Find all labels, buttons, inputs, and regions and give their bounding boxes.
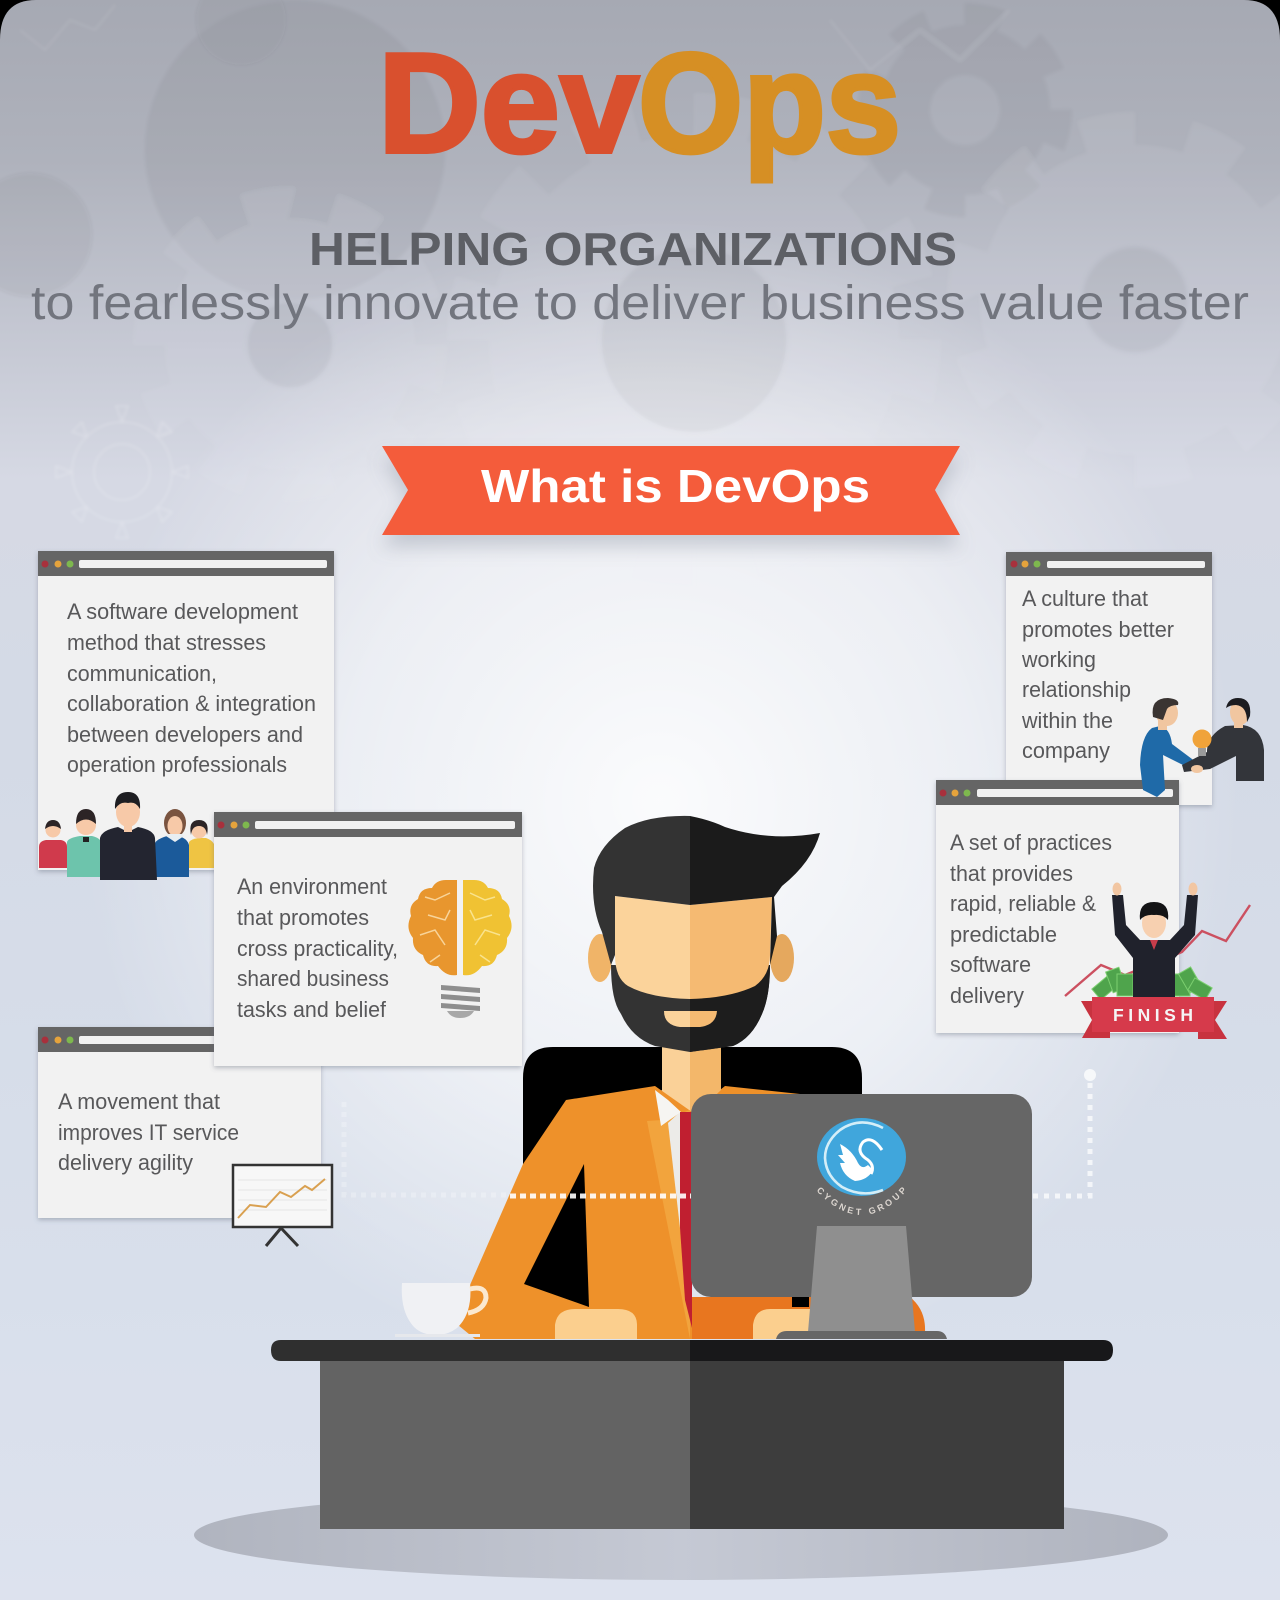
panel: culture working relationship: relationship (1022, 677, 1131, 702)
icon: presentation chart board (233, 1165, 332, 1246)
panel: software development method: communication, (67, 661, 217, 686)
panel: environment cross practicality: An environment (237, 874, 387, 899)
panel: set of practices: A set of practices (950, 830, 1112, 855)
illustration: office chair (523, 1047, 862, 1175)
neck (655, 1040, 721, 1120)
finish ribbon: FINISH (1113, 1005, 1193, 1025)
panel: environment cross practicality: cross practicality, (237, 936, 398, 961)
mouth (664, 1011, 717, 1027)
logo: Cygnet Group (817, 1118, 906, 1215)
banner: What is DevOps (382, 446, 960, 535)
panel: culture working relationship: A culture that (1022, 586, 1148, 611)
panel: set of practices: delivery (950, 983, 1024, 1008)
person arms raised (1112, 882, 1198, 997)
beard (611, 965, 770, 1052)
lightbulb (1192, 730, 1212, 756)
man in black (1182, 698, 1264, 781)
lower suit right (692, 1297, 925, 1339)
panel: software development method: A software development (67, 599, 298, 624)
title: DevOps (378, 24, 901, 183)
panel: software development method (38, 551, 334, 870)
panel: environment cross practicality: that promotes (237, 905, 369, 930)
panel: software development method: operation professionals (67, 752, 287, 777)
panel: set of practices: rapid, reliable & (950, 891, 1096, 916)
person: black centre (100, 792, 157, 880)
right suit shoulder (690, 1086, 800, 1160)
monitor base (776, 1331, 947, 1339)
icon: handshake (1140, 698, 1264, 797)
icon: coffee cup (395, 1283, 486, 1337)
panel: set of practices: software (950, 952, 1031, 977)
dotted line across suit (510, 1194, 694, 1198)
person: yellow (189, 820, 214, 868)
icon: brain light bulb (408, 880, 512, 1018)
panel: culture working relationship (1006, 552, 1212, 805)
background gears (0, 0, 1280, 565)
icon: group of people (39, 792, 214, 880)
subtitle: to fearlessly innovate to deliver business value faster (31, 277, 1249, 330)
face (615, 896, 772, 999)
panel: movement improves IT service (38, 1027, 321, 1218)
suit inner shadow (524, 1164, 589, 1307)
panel: culture working relationship: working (1021, 647, 1096, 672)
panel: software development method: collaboration & integration (67, 691, 316, 716)
panel: environment cross practicality (214, 812, 522, 1066)
panel: set of practices: that provides (950, 861, 1073, 886)
panel: environment cross practicality: shared business (237, 966, 389, 991)
hair (593, 816, 820, 965)
panel: movement improves IT service: delivery agility (58, 1150, 193, 1175)
panel: culture working relationship: company (1022, 738, 1110, 763)
panel: software development method: between developers and (67, 722, 303, 747)
icon: winner with finish ribbon (1065, 882, 1250, 1039)
panel: culture working relationship: promotes better (1022, 617, 1174, 642)
finish ribbon (1081, 997, 1227, 1039)
panel: software development method: method that stresses (67, 630, 266, 655)
person: blue (155, 809, 189, 877)
money (1092, 967, 1212, 1000)
illustration: monitor (691, 1094, 1032, 1339)
panel: set of practices (936, 780, 1179, 1033)
shirt (668, 1112, 692, 1300)
heading: helping organizations: HELPING ORGANIZATIONS (309, 223, 957, 275)
panel: environment cross practicality: tasks and belief (237, 997, 387, 1022)
monitor stand (808, 1226, 915, 1332)
man in blue (1140, 698, 1200, 797)
hands (555, 1309, 812, 1339)
panel: culture working relationship: within the (1021, 708, 1113, 733)
panel: set of practices: predictable (950, 922, 1057, 947)
panel: movement improves IT service: A movement that (58, 1089, 220, 1114)
title: DevOps: Dev (378, 24, 639, 183)
person: teal (67, 809, 101, 877)
illustration: man (458, 816, 925, 1339)
faint dotted connector lines (344, 1069, 1096, 1196)
panel: movement improves IT service: improves IT service (58, 1120, 239, 1145)
ears (588, 934, 794, 982)
illustration: desk (271, 1340, 1113, 1529)
person: red (39, 820, 67, 868)
rising red chart line (1065, 905, 1250, 996)
title: DevOps: Ops (638, 24, 901, 183)
floor shadow (194, 1490, 1168, 1580)
lapel (647, 1110, 690, 1339)
logo: Cygnet Group: CYGNET GROUP (818, 1187, 904, 1215)
banner: What is DevOps: What is DevOps (481, 460, 870, 512)
suit left (458, 1086, 692, 1339)
monitor screen back (691, 1094, 1032, 1297)
tie (680, 1112, 692, 1328)
collar (655, 1090, 681, 1126)
